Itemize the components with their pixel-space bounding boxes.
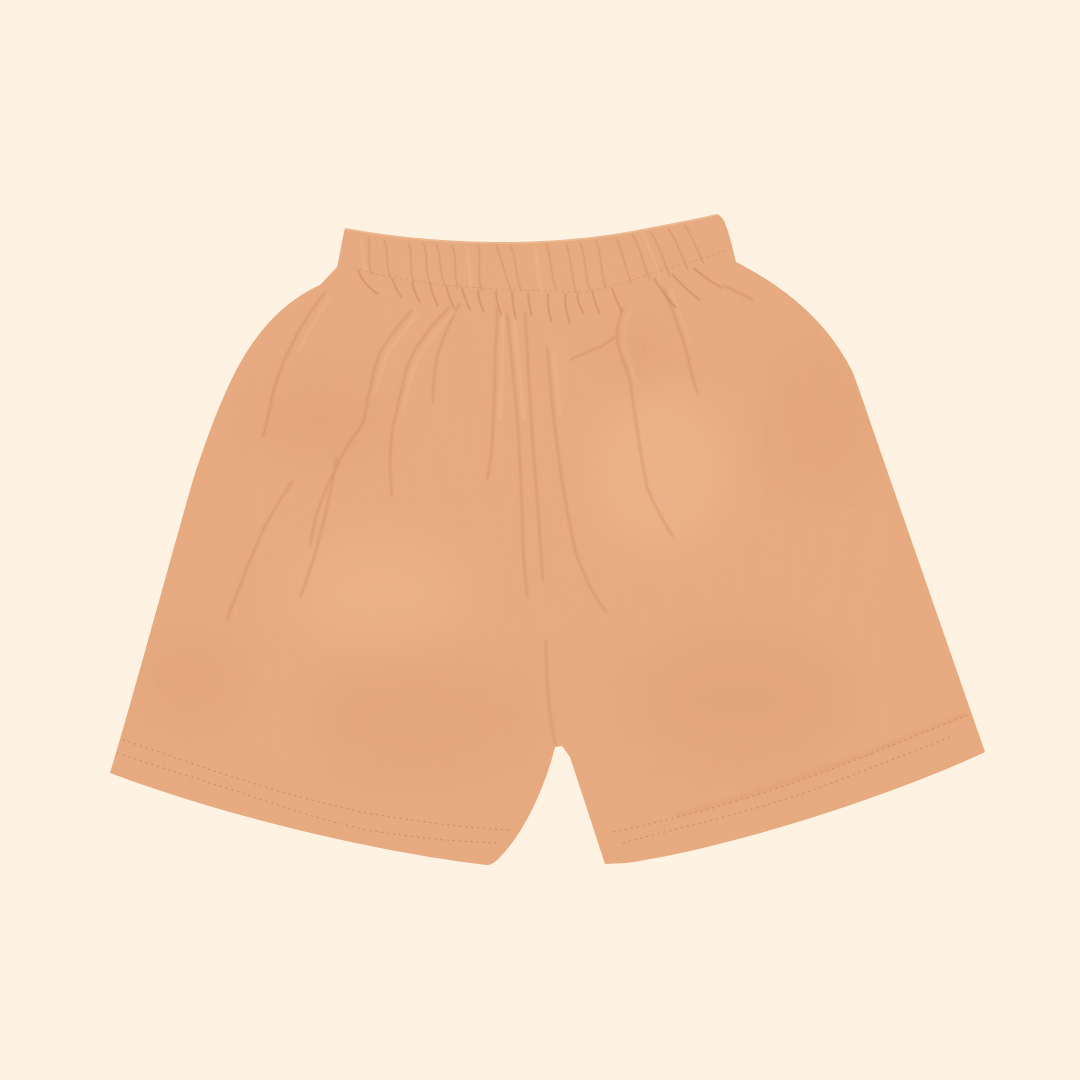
illustration: peach muslin shorts xyxy=(110,214,985,865)
waistband gathers xyxy=(345,215,727,324)
shorts body xyxy=(100,200,1000,880)
fabric wrinkles xyxy=(227,285,753,620)
right hem fold xyxy=(675,714,967,816)
inseam xyxy=(546,640,555,745)
dark fold patch xyxy=(614,329,666,361)
hem stitching xyxy=(117,715,967,843)
